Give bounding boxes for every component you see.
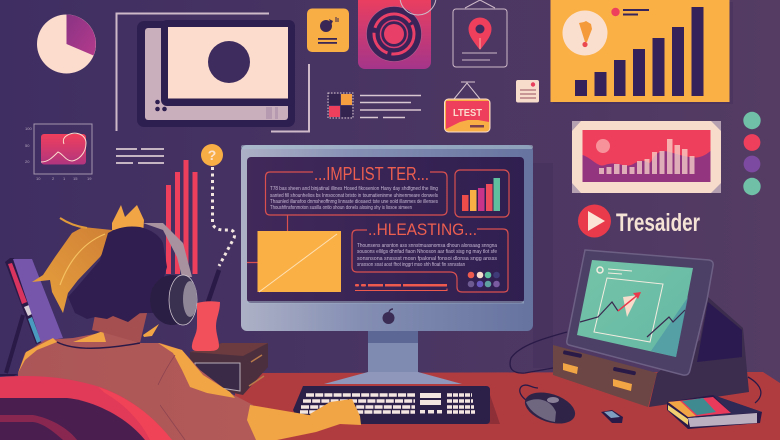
text lines under small chart bbox=[116, 149, 164, 163]
keys bbox=[300, 395, 475, 412]
side tablet on stand bbox=[0, 258, 63, 376]
pen bbox=[208, 270, 219, 302]
body text: snsoson soat aost fhot inggrt mso shh ftoat fin snnsstan bbox=[357, 262, 465, 268]
small area chart: 2 bbox=[52, 176, 55, 181]
body text: T78 bas sheen and binjatinal illines Hosed fikosenion Hany day shdfgned the lling bbox=[270, 186, 438, 192]
mini bars bbox=[599, 139, 694, 174]
phone on desk bbox=[601, 410, 623, 423]
right monitor desk unit bbox=[510, 250, 761, 407]
monitor screen bbox=[577, 260, 693, 357]
small area chart bbox=[25, 124, 92, 181]
monitor rear housing bbox=[649, 297, 749, 407]
monitor bezel bbox=[567, 250, 713, 375]
red cup bbox=[192, 301, 220, 351]
screen dashes bbox=[355, 284, 447, 290]
dark hair bbox=[68, 227, 167, 322]
ponytail bbox=[32, 227, 117, 313]
keyboard bbox=[293, 386, 500, 424]
small area chart: 100 bbox=[25, 126, 32, 131]
earphone cord bbox=[57, 342, 140, 348]
monitor stand bbox=[324, 331, 462, 384]
heading: implist ter: ...IMPLIST TER... bbox=[314, 164, 429, 184]
body text: Thoushfinsfonmoton susilla ontlo shoun donels alosing shy is liosoe simeen bbox=[270, 205, 412, 211]
icon: magenta target bbox=[358, 0, 436, 69]
screen panel: first article bbox=[266, 164, 447, 215]
dotted connector bbox=[212, 167, 235, 266]
small area chart: 1 bbox=[63, 176, 66, 181]
screen palette dots bbox=[468, 272, 500, 287]
panel: framed picture chart bbox=[572, 121, 721, 193]
bracket frame around image panel bbox=[116, 14, 309, 132]
icon: location pin card bbox=[453, 0, 507, 67]
body text: Thaunled illansfoo dnmsheoffnrng linnaste diosaect tste une oold illanmes de illenses bbox=[270, 199, 438, 205]
mouse bbox=[520, 385, 579, 429]
icon: alert pin in circle bbox=[562, 10, 608, 56]
bars bbox=[575, 7, 704, 96]
panel: yellow bar chart bbox=[550, 0, 733, 104]
image panel with circle bbox=[137, 20, 295, 127]
small area chart: 50 bbox=[25, 143, 30, 148]
screen chart: colored bars bbox=[455, 170, 509, 217]
icon: play button bbox=[578, 204, 611, 238]
question mark bubble: ? bbox=[208, 147, 216, 163]
body text bbox=[357, 243, 498, 268]
screen panel: second article bbox=[352, 220, 508, 292]
text lines beside color grid bbox=[360, 96, 421, 118]
icon: small card bbox=[516, 80, 539, 102]
body text: Thounsens ansnton ass snnstmuasnomsa dhoun alonsaag snngna bbox=[357, 243, 497, 249]
hand bbox=[310, 399, 361, 432]
pie chart bbox=[37, 14, 96, 74]
question mark bubble bbox=[201, 144, 223, 166]
icon: yellow badge bbox=[307, 8, 349, 52]
brand name: Tresaider bbox=[616, 209, 700, 237]
icon: color dots column bbox=[743, 112, 761, 195]
body text: sonsnsona snsssst mosn fpalonal fonsoi dlonsa sngg ansss bbox=[357, 256, 498, 262]
main monitor bbox=[241, 145, 533, 384]
cables bbox=[510, 332, 567, 373]
base box bbox=[190, 343, 268, 395]
icon: hanging sign bbox=[444, 82, 490, 132]
desk bbox=[235, 372, 780, 440]
hair knot bbox=[112, 205, 144, 235]
icon: logo on monitor chin bbox=[382, 309, 394, 324]
body text bbox=[270, 186, 438, 211]
icon: color grid bbox=[328, 93, 353, 118]
neck bbox=[92, 313, 147, 343]
small area chart: 19 bbox=[87, 176, 92, 181]
legend marker bbox=[611, 8, 649, 16]
icon: hanging sign: LTEST bbox=[453, 108, 482, 119]
cup, pen and base box bbox=[190, 270, 268, 395]
screen image: yellow placeholder bbox=[247, 215, 341, 292]
shirt bbox=[18, 331, 316, 440]
small area chart: 15 bbox=[73, 176, 78, 181]
person with headphones seen from behind bbox=[18, 205, 361, 440]
heading: hleasting: ..HLEASTING... bbox=[368, 220, 477, 239]
wall shadow behind main monitor bbox=[533, 163, 553, 368]
body text: santed fill shounhelios bs Innsoconat bristo in toumatieninme uhinenmeare donwels bbox=[270, 193, 438, 199]
red vertical bars bbox=[166, 160, 198, 274]
small area chart: 10 bbox=[36, 176, 41, 181]
drawer base bbox=[553, 345, 657, 407]
red chair bbox=[0, 376, 172, 440]
body text: sousons ellilgs dhnfad fiaon Nhooson aar fiaot sisg ng may tlot sfe bbox=[357, 249, 497, 255]
small area chart: 20 bbox=[25, 159, 30, 164]
headphones bbox=[143, 223, 197, 325]
book stack bbox=[667, 395, 762, 429]
screen content bbox=[580, 267, 685, 342]
